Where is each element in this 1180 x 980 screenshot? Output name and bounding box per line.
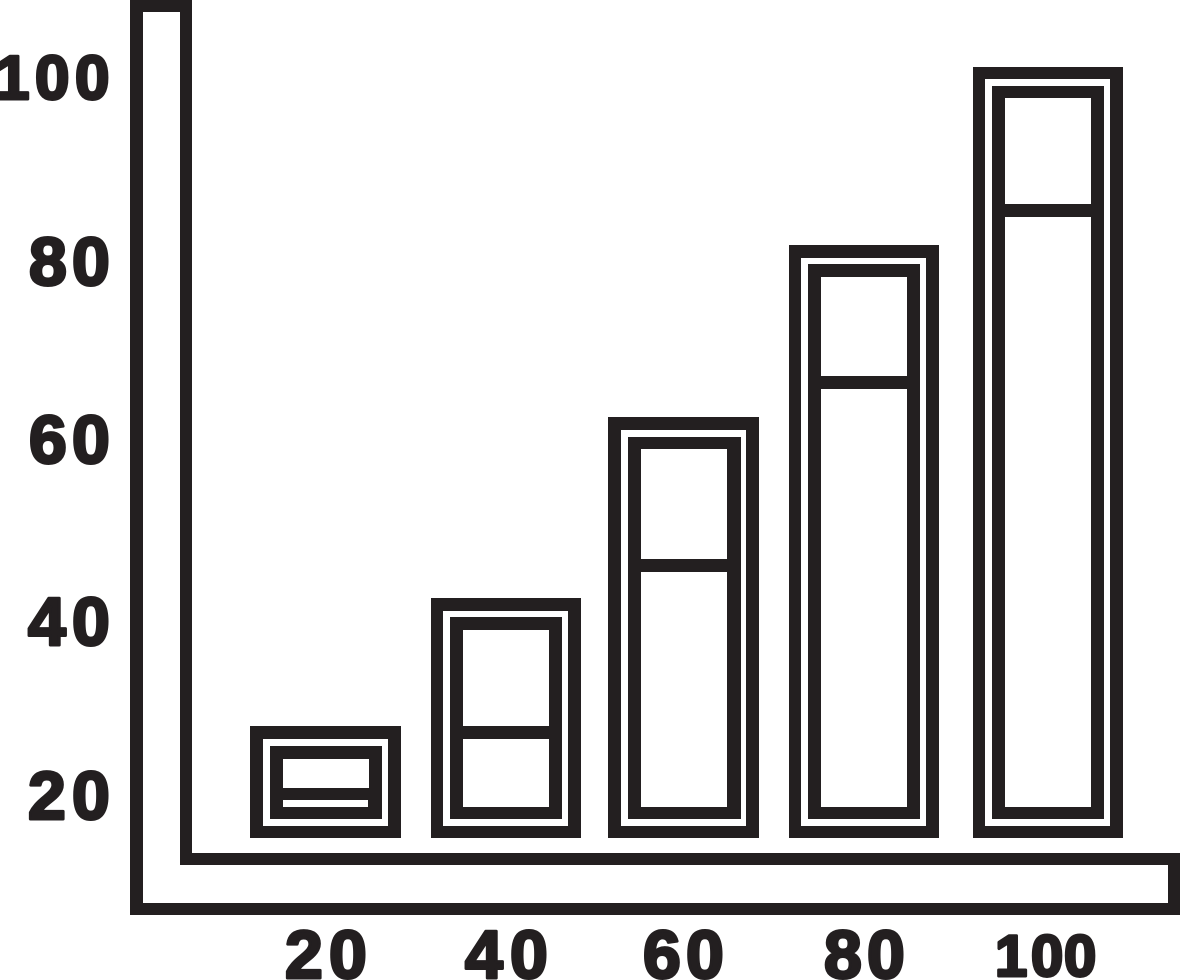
bar: 20 <box>250 726 401 838</box>
y-axis labels: 60 <box>29 402 110 478</box>
bar: 80 <box>789 245 939 838</box>
bar: 40 <box>431 598 581 838</box>
x-axis labels <box>285 917 1096 980</box>
y-axis labels <box>0 44 110 834</box>
bar: 100 <box>973 67 1123 838</box>
bar: 60 <box>608 417 759 838</box>
y-axis labels: 40 <box>28 584 110 660</box>
y-axis labels: 80 <box>29 224 110 300</box>
y-axis labels: 20 <box>28 758 110 834</box>
